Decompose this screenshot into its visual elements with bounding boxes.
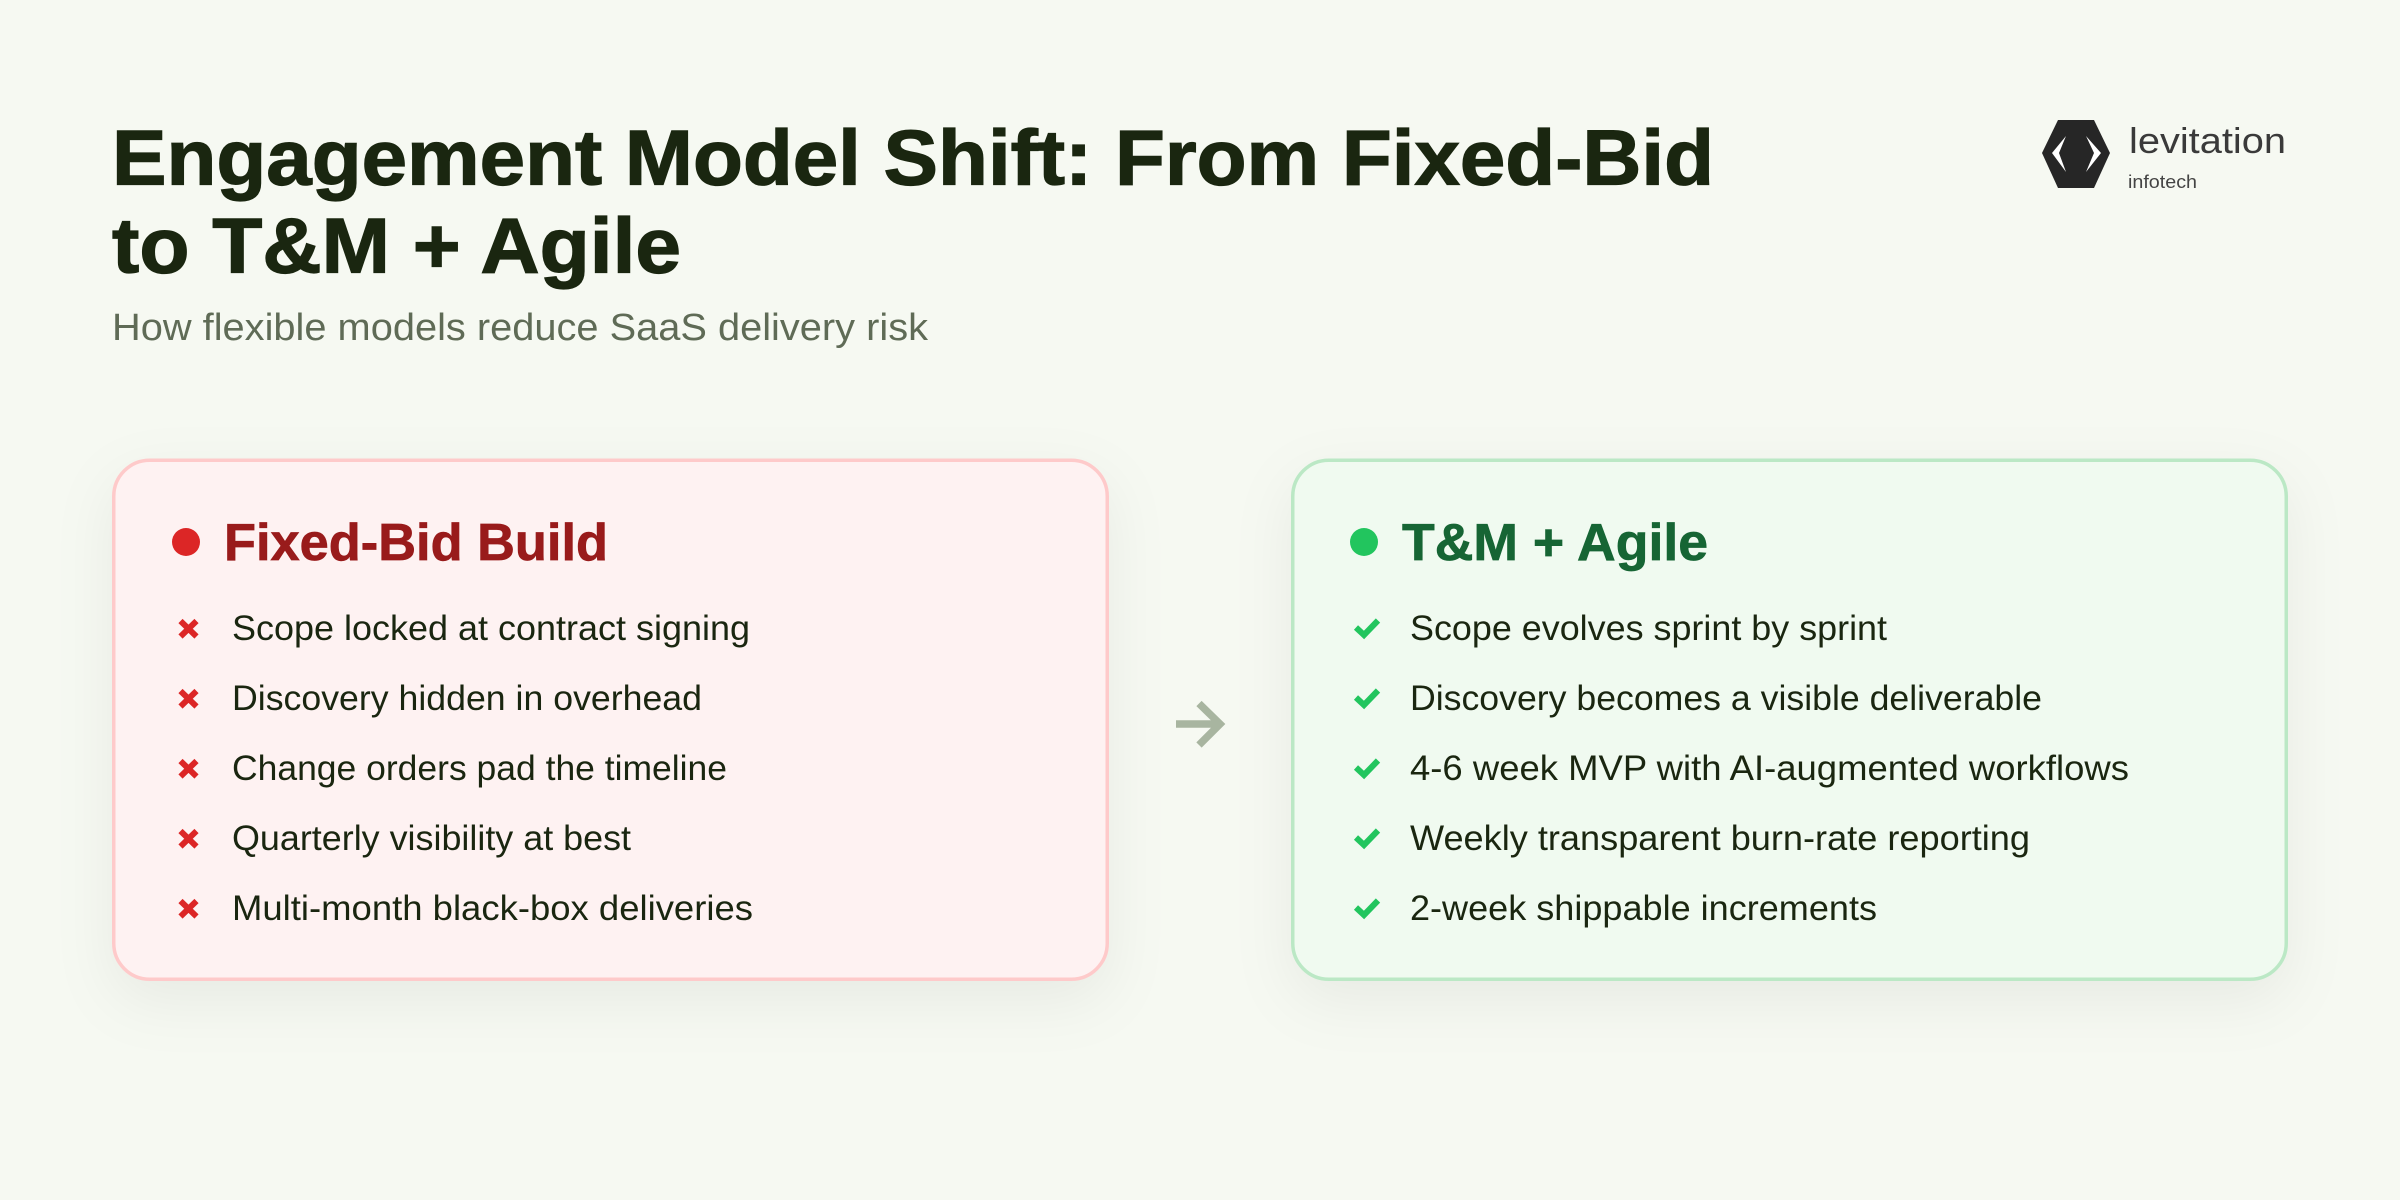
icon: check xyxy=(1356,830,1378,845)
icon: cross xyxy=(180,901,196,916)
panel: Fixed-Bid Build xyxy=(114,460,1107,979)
list: T&M benefits: 4-6 week MVP with AI-augmented workflows xyxy=(1410,749,2129,788)
heading: T&M + Agile: T&M + Agile xyxy=(1402,514,1708,572)
list: T&M benefits: Scope evolves sprint by sprint xyxy=(1410,609,1887,648)
subtitle: How flexible models reduce SaaS delivery risk xyxy=(112,307,929,349)
icon: cross xyxy=(180,621,196,636)
list: fixed-bid drawbacks: Multi-month black-box deliveries xyxy=(232,889,753,928)
list: T&M benefits: 2-week shippable increments xyxy=(1410,889,1877,928)
icon: check xyxy=(1356,760,1378,775)
arrow xyxy=(1176,704,1220,745)
list: T&M benefits xyxy=(1356,609,2129,928)
title: to T&M + Agile xyxy=(112,202,681,290)
logo: levitation infotech xyxy=(2042,120,2286,192)
icon: cross xyxy=(180,831,196,846)
logo subtext: infotech xyxy=(2128,172,2197,192)
list: fixed-bid drawbacks: Change orders pad the timeline xyxy=(232,749,727,788)
icon: cross xyxy=(180,761,196,776)
icon: check xyxy=(1356,900,1378,915)
list: fixed-bid drawbacks: Scope locked at contract signing xyxy=(232,609,750,648)
icon: check xyxy=(1356,690,1378,705)
list: T&M benefits: Weekly transparent burn-rate reporting xyxy=(1410,819,2030,858)
icon: cross xyxy=(180,691,196,706)
list: fixed-bid drawbacks xyxy=(180,609,753,928)
list: fixed-bid drawbacks: Discovery hidden in overhead xyxy=(232,679,702,718)
status dot: red xyxy=(172,528,200,556)
icon: hexagon logo mark xyxy=(2042,120,2110,188)
status dot: green xyxy=(1350,528,1378,556)
panel: T&M + Agile xyxy=(1293,460,2286,979)
list: fixed-bid drawbacks: Quarterly visibility at best xyxy=(232,819,631,858)
icon: check xyxy=(1356,620,1378,635)
list: T&M benefits: Discovery becomes a visible deliverable xyxy=(1410,679,2042,718)
logo wordmark: levitation xyxy=(2129,120,2286,161)
title xyxy=(112,114,1714,290)
heading: Fixed-Bid Build: Fixed-Bid Build xyxy=(224,514,608,572)
title: Engagement Model Shift: From Fixed-Bid xyxy=(112,114,1714,202)
